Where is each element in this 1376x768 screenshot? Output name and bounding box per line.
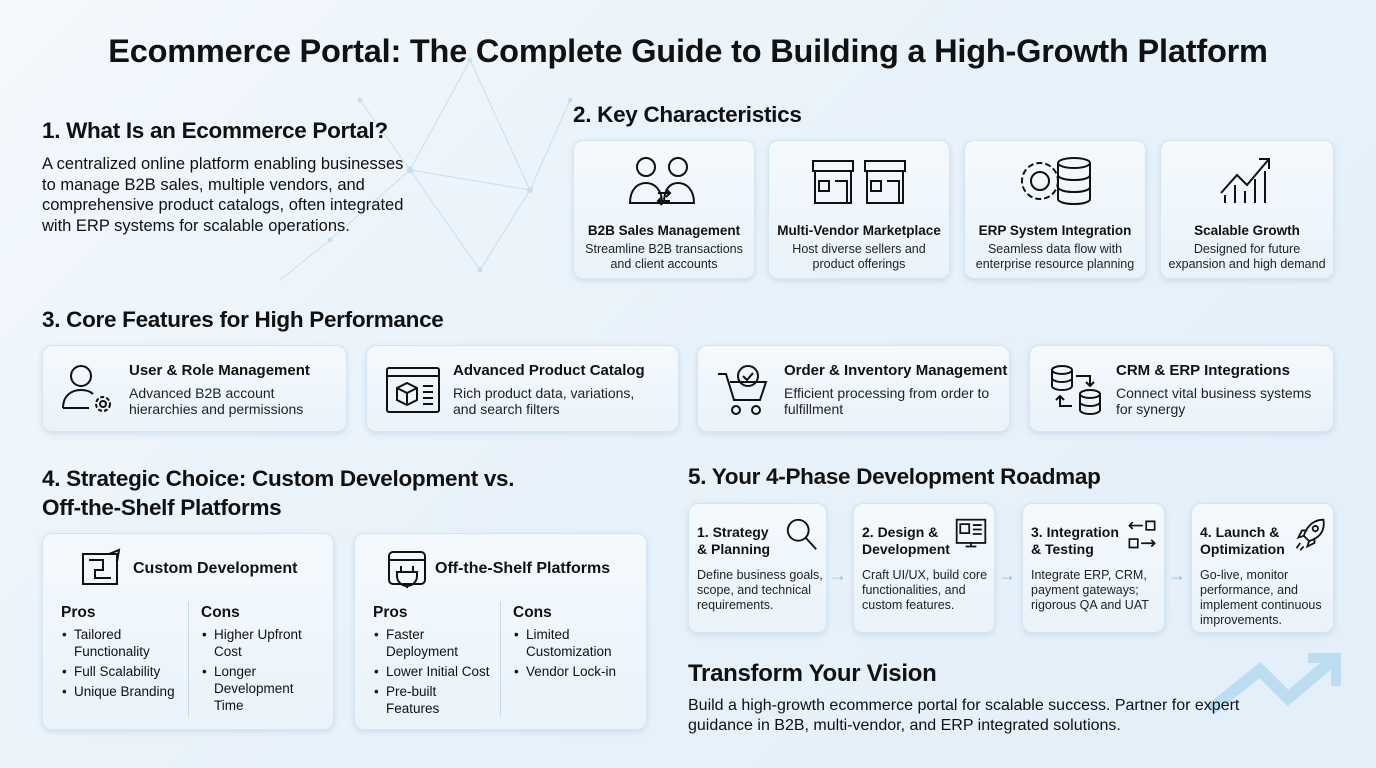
card: CRM & ERP: CRM & ERP Integrations <box>1116 362 1290 379</box>
icon: magnifier <box>786 518 817 550</box>
roadmap step 2 <box>853 503 995 633</box>
pros list: Functionality <box>74 644 150 659</box>
decorative network background <box>280 58 572 280</box>
card: Scalable Growth: expansion and high demand <box>1168 257 1326 271</box>
heading: section 4: 4. Strategic Choice: Custom Development vs. <box>42 466 514 491</box>
icon: browser plug <box>388 551 426 588</box>
card: Product Catalog: and search filters <box>453 401 560 417</box>
pros list: Unique Branding <box>74 684 175 699</box>
card: Product Catalog: Rich product data, variations, <box>453 385 634 401</box>
roadmap step 4: Optimization <box>1200 541 1285 557</box>
card: Multi-Vendor <box>768 140 950 279</box>
icon: growth chart <box>1220 158 1270 203</box>
card: Product Catalog: Advanced Product Catalog <box>453 362 645 379</box>
heading: section 3: 3. Core Features for High Performance <box>42 307 444 332</box>
roadmap step 1: & Planning <box>697 541 770 557</box>
card: Order & Inventory <box>697 345 1010 432</box>
roadmap step 1 <box>688 503 827 633</box>
card: User & Role: hierarchies and permissions <box>129 401 303 417</box>
title: Ecommerce Portal: The Complete Guide to Building a High-Growth Platform <box>108 33 1268 69</box>
cons list <box>513 604 616 679</box>
cons list: Longer <box>214 664 256 679</box>
heading: section 1: 1. What Is an Ecommerce Portal? <box>42 118 388 143</box>
cons list: Customization <box>526 644 612 659</box>
icon: exchange arrows <box>1128 520 1156 548</box>
roadmap step 2: 2. Design & <box>862 524 938 540</box>
card: B2B Sales: B2B Sales Management <box>588 223 740 238</box>
card: Scalable Growth: Designed for future <box>1194 242 1300 256</box>
card: CRM & ERP <box>1029 345 1334 432</box>
pros list: Faster <box>386 627 424 642</box>
roadmap step 4: 4. Launch & <box>1200 524 1279 540</box>
card: Multi-Vendor: Multi-Vendor Marketplace <box>777 223 941 238</box>
card: Product Catalog <box>366 345 679 432</box>
icon: gear database <box>1021 157 1091 205</box>
heading: transform your vision: Transform Your Vision <box>688 660 936 687</box>
card: Scalable Growth: Scalable Growth <box>1194 223 1300 238</box>
heading: section 5: 5. Your 4-Phase Development Roadmap <box>688 464 1101 489</box>
card: B2B Sales <box>573 140 755 279</box>
roadmap step 4 <box>1191 503 1334 633</box>
cons list: Higher Upfront <box>214 627 302 642</box>
pros list: Deployment <box>386 644 458 659</box>
card: ERP: ERP System Integration <box>979 223 1131 238</box>
card: Multi-Vendor: Host diverse sellers and <box>792 242 926 256</box>
heading: section 4: Off-the-Shelf Platforms <box>42 495 281 520</box>
pros list: Pre-built <box>386 684 436 699</box>
roadmap step 1: Define business goals, scope, and technical requirements. <box>697 568 823 612</box>
card: ERP: enterprise resource planning <box>976 257 1134 271</box>
card: ERP: Seamless data flow with <box>988 242 1122 256</box>
pros list <box>61 604 175 699</box>
panel: custom development <box>42 533 334 730</box>
roadmap step 3 <box>1022 503 1165 633</box>
card: Order & Inventory: fulfillment <box>784 401 843 417</box>
icon: people <box>629 157 695 206</box>
icon: user gear <box>62 365 111 412</box>
cons list: Development <box>214 681 294 696</box>
pros list: Full Scalability <box>74 664 160 679</box>
card: Scalable Growth <box>1160 140 1334 279</box>
card: Multi-Vendor: product offerings <box>813 257 905 271</box>
roadmap step 3: & Testing <box>1031 541 1094 557</box>
text: definition: A centralized online platform enabling businesses to manage B2B sales, multiple vendors, and comprehensive product catalogs, often integrated with ERP systems for scalable operations. <box>42 155 403 234</box>
pros list: Tailored <box>74 627 121 642</box>
roadmap step 2: Development <box>862 541 950 557</box>
cons list <box>201 604 302 713</box>
decorative arrow <box>1206 653 1341 714</box>
card: CRM & ERP: Connect vital business systems <box>1116 385 1311 401</box>
card: B2B Sales: and client accounts <box>610 257 718 271</box>
roadmap step 3: Integrate ERP, CRM, payment gateways; rigorous QA and UAT <box>1031 568 1149 612</box>
cons list: Limited <box>526 627 570 642</box>
icon: blueprint <box>82 548 120 585</box>
card: User & Role: User & Role Management <box>129 362 310 379</box>
panel: custom development: Custom Development <box>133 560 297 577</box>
icon: rocket <box>1296 518 1325 551</box>
card: Order & Inventory: Efficient processing from order to <box>784 385 989 401</box>
card: Order & Inventory: Order & Inventory Management <box>784 362 1007 379</box>
arrow: → <box>998 565 1016 585</box>
cons list: Time <box>214 698 244 713</box>
icon: monitor <box>956 518 986 548</box>
roadmap step 2: Craft UI/UX, build core functionalities, and custom features. <box>862 568 987 612</box>
icon: sync databases <box>1051 365 1101 415</box>
cons list: Cost <box>214 644 242 659</box>
text: call to action: Build a high-growth ecommerce portal for scalable success. Partner for expert guidance in B2B, multi-vendor, and ERP integrated solutions. <box>688 697 1239 734</box>
icon: cart <box>718 365 768 415</box>
pros list <box>373 604 490 716</box>
pros list: Features <box>386 701 439 716</box>
pros list: Lower Initial Cost <box>386 664 490 679</box>
arrow: → <box>829 565 847 585</box>
card: User & Role: Advanced B2B account <box>129 385 275 401</box>
cons list: Vendor Lock-in <box>526 664 616 679</box>
icon: catalog <box>386 367 440 413</box>
arrow: → <box>1168 565 1186 585</box>
icon: storefronts <box>812 160 906 204</box>
card: User & Role <box>42 345 347 432</box>
card: ERP <box>964 140 1146 279</box>
roadmap step 3: 3. Integration <box>1031 524 1119 540</box>
roadmap step 1: 1. Strategy <box>697 524 769 540</box>
cons list: Cons <box>201 604 240 621</box>
panel: off-the-shelf <box>354 533 647 730</box>
panel: off-the-shelf: Off-the-Shelf Platforms <box>435 560 610 577</box>
heading: section 4 <box>42 466 514 520</box>
card: B2B Sales: Streamline B2B transactions <box>585 242 743 256</box>
heading: section 2: 2. Key Characteristics <box>573 102 802 127</box>
roadmap step 4: Go-live, monitor performance, and implement continuous improvements. <box>1200 568 1322 627</box>
pros list: Pros <box>61 604 95 621</box>
cons list: Cons <box>513 604 552 621</box>
card: CRM & ERP: for synergy <box>1116 401 1185 417</box>
pros list: Pros <box>373 604 407 621</box>
